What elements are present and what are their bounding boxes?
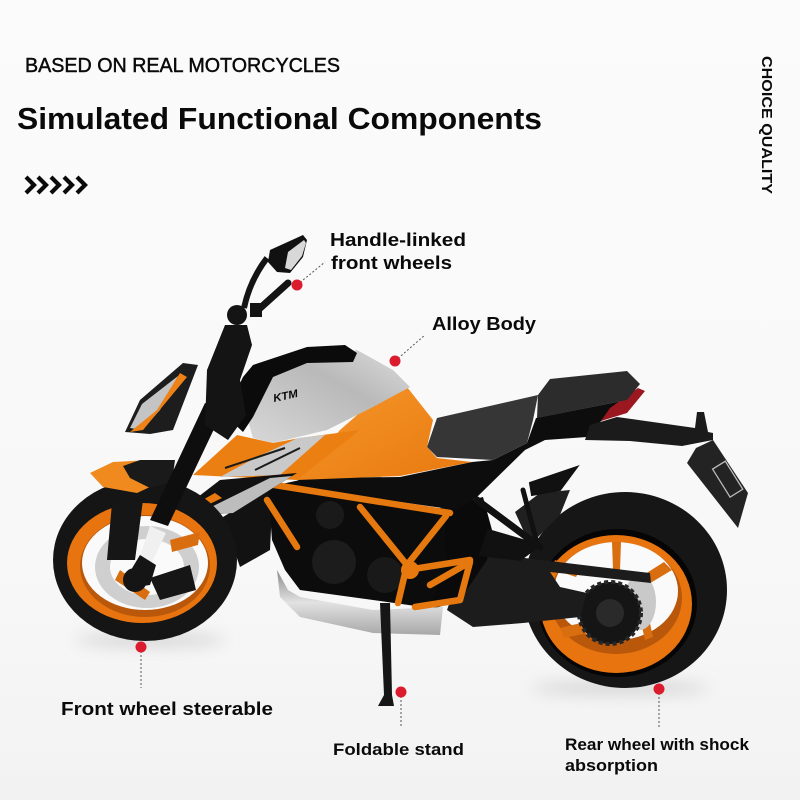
callout: handle-linked front wheels: Handle-linked (330, 229, 466, 250)
exhaust (277, 570, 443, 635)
icon: chevrons (26, 177, 85, 193)
rear subframe (290, 400, 627, 510)
vertical label: CHOICE QUALITY (758, 56, 774, 194)
callout: handle-linked front wheels: front wheels (331, 252, 452, 273)
callout: rear wheel with shock absorption: absorption (565, 757, 658, 775)
subtitle: BASED ON REAL MOTORCYCLES (25, 55, 340, 77)
pillion seat (537, 371, 640, 418)
orange trellis frame (262, 483, 470, 607)
front wheel (53, 479, 237, 641)
callout: front wheel steerable (61, 642, 273, 719)
title: Simulated Functional Components (17, 101, 542, 136)
KTM logo: KTM (272, 388, 300, 405)
black tank top (225, 345, 357, 432)
swingarm (447, 553, 651, 627)
tail light (601, 388, 645, 421)
motorcycle (53, 235, 748, 706)
rear struts (477, 467, 577, 560)
callout: alloy body (390, 313, 537, 366)
callout: foldable stand: Foldable stand (333, 740, 464, 759)
callout: foldable stand (333, 686, 464, 759)
front fender (90, 460, 175, 493)
headlight (125, 363, 198, 434)
brake caliper and strut (107, 500, 196, 600)
frame node (401, 561, 419, 579)
lower shroud (172, 473, 297, 517)
handlebar and controls (205, 258, 288, 440)
rear wheel (523, 492, 727, 688)
tail bracket (585, 412, 713, 446)
front fork (123, 403, 224, 592)
callout: rear wheel with shock absorption: Rear wheel with shock (565, 736, 750, 754)
ground shadow (75, 634, 710, 694)
rider seat (427, 395, 538, 460)
rear fender (515, 490, 570, 545)
mirror (268, 235, 307, 273)
radiator (223, 487, 273, 567)
side stand (378, 603, 394, 706)
engine (268, 480, 446, 608)
callout: front wheel steerable: Front wheel steerable (61, 698, 273, 719)
orange tank side (297, 387, 472, 480)
silver tank (247, 350, 410, 443)
engine rear filler (430, 497, 492, 610)
license plate (687, 440, 748, 528)
callout: alloy body: Alloy Body (432, 313, 537, 334)
upper shroud (193, 430, 360, 480)
callout: rear wheel with shock absorption (565, 684, 750, 775)
callout: handle-linked front wheels (292, 229, 466, 290)
